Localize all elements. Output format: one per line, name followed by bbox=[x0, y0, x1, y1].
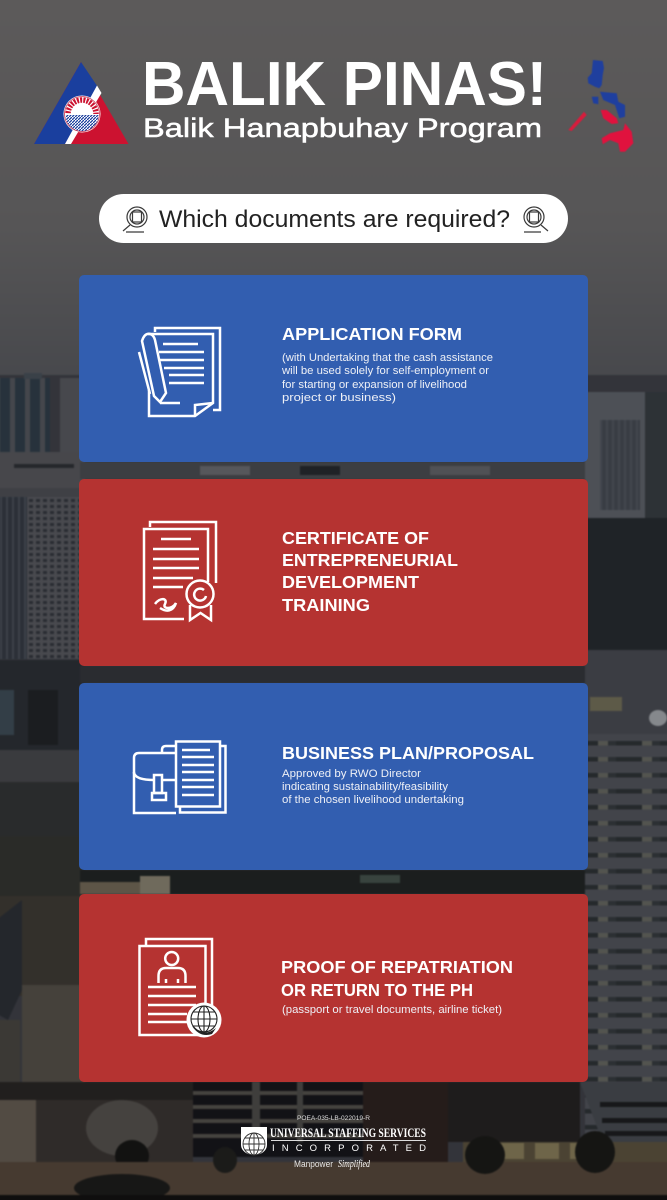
icon: magnifier right bbox=[524, 207, 548, 232]
proof text bbox=[281, 957, 513, 1016]
application form text: (with Undertaking that the cash assistance bbox=[282, 352, 493, 364]
business plan text: of the chosen livelihood undertaking bbox=[282, 794, 464, 806]
tagline: Manpower bbox=[294, 1159, 333, 1169]
business plan text: BUSINESS PLAN/PROPOSAL bbox=[282, 743, 534, 763]
icon: form and pen bbox=[139, 328, 220, 416]
company name: UNIVERSAL STAFFING SERVICES bbox=[270, 1126, 426, 1140]
title: BALIK PINAS! bbox=[142, 50, 547, 119]
certificate text: ENTREPRENEURIAL bbox=[282, 550, 458, 570]
panel: application form bbox=[79, 275, 588, 462]
incorporated: INCORPORATED bbox=[272, 1143, 426, 1154]
search pill bbox=[99, 194, 568, 243]
title: Balik Hanapbuhay Program bbox=[143, 113, 542, 143]
application form text bbox=[281, 324, 493, 404]
pill text: Which documents are required? bbox=[159, 206, 510, 233]
icon: briefcase and document bbox=[134, 742, 226, 813]
proof text: OR RETURN TO THE PH bbox=[281, 980, 473, 1000]
license number: POEA-035-LB-022019-R bbox=[297, 1115, 370, 1122]
icon: certificate with seal bbox=[144, 522, 216, 620]
business plan text: indicating sustainability/feasibility bbox=[282, 781, 449, 793]
panel: business plan bbox=[79, 683, 588, 870]
icon: Philippines map bbox=[568, 60, 633, 152]
application form text: APPLICATION FORM bbox=[282, 324, 462, 344]
proof text: (passport or travel documents, airline ticket) bbox=[282, 1004, 502, 1016]
icon: magnifier left bbox=[123, 207, 147, 232]
business plan text: Approved by RWO Director bbox=[282, 768, 421, 780]
certificate text: TRAINING bbox=[282, 595, 370, 615]
certificate text bbox=[282, 528, 458, 615]
tagline bbox=[294, 1159, 371, 1170]
certificate text: CERTIFICATE OF bbox=[282, 528, 429, 548]
application form text: for starting or expansion of livelihood bbox=[282, 379, 467, 391]
logo: DOLE triangle bbox=[34, 62, 128, 144]
application form text: will be used solely for self-employment or bbox=[281, 365, 489, 377]
business plan text bbox=[282, 743, 534, 806]
icon: globe badge bbox=[186, 1002, 222, 1038]
footer: agency logo bbox=[241, 1115, 426, 1170]
panel: certificate bbox=[79, 479, 588, 666]
icon: profile document with globe bbox=[140, 939, 212, 1035]
tagline: Simplified bbox=[338, 1159, 371, 1170]
application form text: project or business) bbox=[282, 392, 396, 404]
proof text: PROOF OF REPATRIATION bbox=[281, 957, 513, 977]
panel: proof of repatriation bbox=[79, 894, 588, 1082]
certificate text: DEVELOPMENT bbox=[282, 572, 419, 592]
icon: globe logo bbox=[241, 1127, 267, 1155]
